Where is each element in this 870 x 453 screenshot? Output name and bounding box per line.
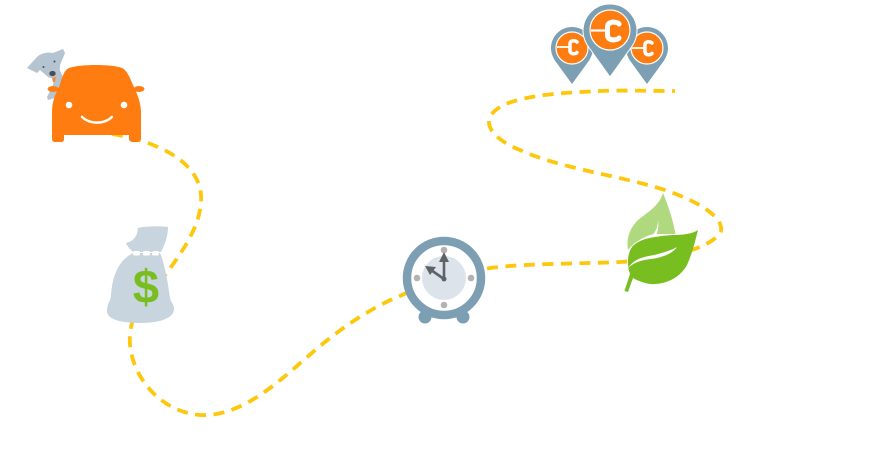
icon: leaves (624, 193, 698, 292)
center pin (583, 4, 637, 77)
icon: clock (407, 241, 481, 324)
front leaf vein (628, 247, 677, 268)
bag neck (126, 226, 168, 252)
car smile (82, 117, 112, 123)
car body (52, 65, 141, 142)
bag body (107, 253, 174, 323)
clock feet (418, 310, 470, 324)
left pin (551, 27, 593, 84)
dog head (27, 49, 65, 78)
car headlights (66, 102, 127, 108)
dog body (47, 68, 65, 100)
dog nose and eyes (42, 60, 56, 76)
clock rim (407, 241, 481, 315)
icon: dog (27, 49, 65, 100)
dog tongue (52, 77, 56, 82)
back leaf (627, 193, 676, 250)
dollar sign: $ (133, 260, 159, 313)
front leaf (624, 230, 698, 292)
icon: money bag (107, 226, 174, 323)
bag tie (133, 251, 159, 256)
dashed route line (112, 91, 721, 415)
back leaf vein (652, 220, 658, 236)
clock inner dial (422, 256, 466, 300)
icon: orange car (48, 65, 144, 142)
clock hands (425, 252, 449, 282)
icon: location pins (551, 4, 668, 84)
hour markers (414, 247, 474, 308)
car mirrors (48, 86, 144, 92)
right pin (626, 27, 668, 84)
